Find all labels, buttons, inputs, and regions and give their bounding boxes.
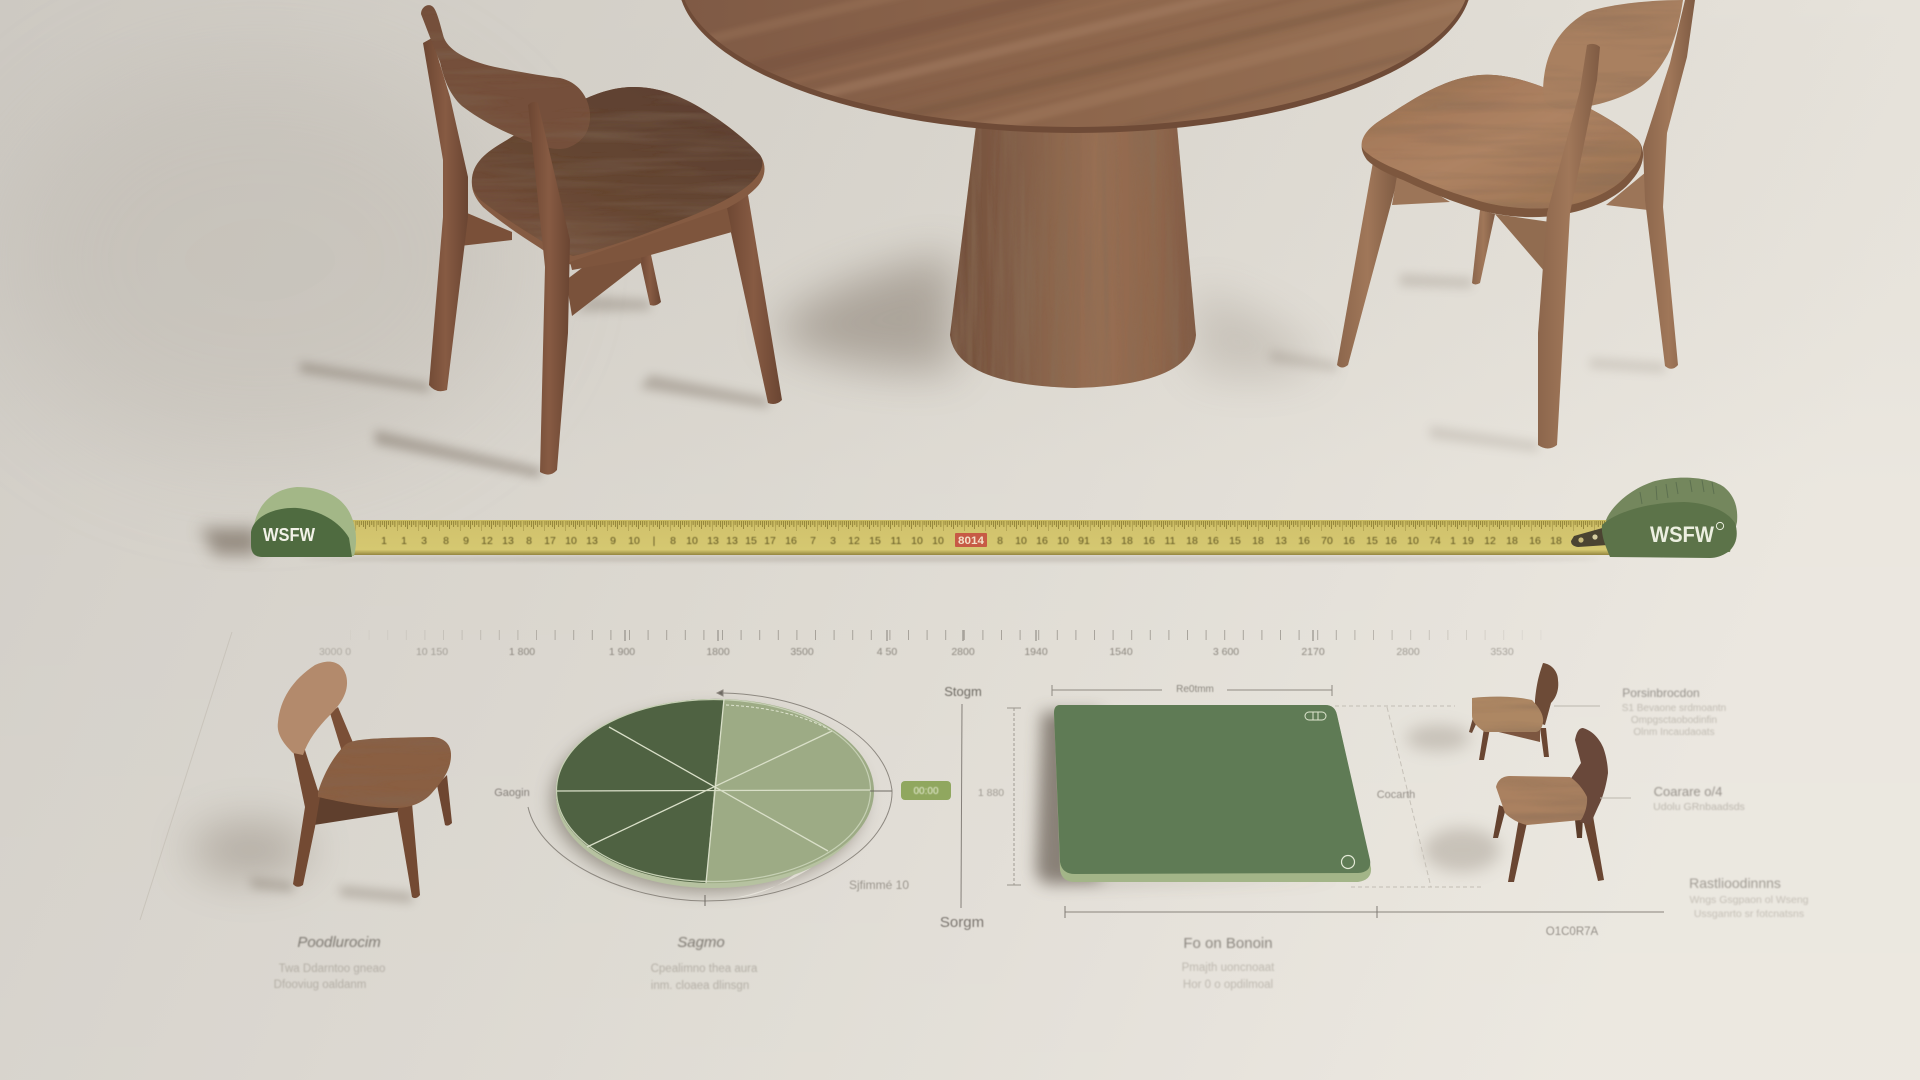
zone pill icon — [1305, 712, 1326, 720]
note lower right: Ussganrto sr fotcnatsns — [1694, 908, 1804, 920]
measurement scale labels: 3500 — [790, 646, 814, 658]
note upper right: Olnm Incaudaoats — [1633, 727, 1715, 738]
tape numbers: 10 — [1057, 535, 1069, 547]
tape numbers: 91 — [1078, 535, 1090, 547]
tape numbers: 16 — [1343, 535, 1355, 547]
tape numbers: 16 — [1143, 535, 1155, 547]
caption: chair: Dfooviug oaldanm — [274, 979, 366, 991]
floor shadows of table and chairs — [190, 255, 1665, 903]
note middle right: Coarare o/4 — [1654, 784, 1722, 799]
caption: pie: Cpealimno thea aura — [651, 963, 758, 975]
tape numbers: 17 — [764, 535, 776, 547]
caption: zone: Hor 0 o opdilmoal — [1183, 979, 1273, 991]
caption: zone: Pmajth uoncnoaat — [1182, 962, 1275, 974]
chair: large left, dark walnut — [421, 5, 782, 475]
measurement scale labels: 4 50 — [877, 646, 897, 658]
tape numbers: 74 — [1429, 535, 1441, 547]
panel height bracket — [978, 708, 1021, 885]
tape numbers: 10 — [1015, 535, 1027, 547]
bottom dimension — [1065, 906, 1664, 938]
note upper right: Porsinbrocdon — [1622, 686, 1700, 700]
pie dark half — [556, 699, 724, 883]
tape numbers: 12 — [481, 535, 493, 547]
caption: chair: Poodlurocim — [297, 934, 381, 951]
tape numbers — [381, 535, 1562, 547]
pie outer measure arcs — [528, 690, 892, 906]
note upper right: Ompgsctaobodinfin — [1631, 715, 1717, 726]
tape numbers: 15 — [745, 535, 757, 547]
tape numbers: 16 — [1298, 535, 1310, 547]
measurement scale labels: 3000 0 — [319, 646, 351, 658]
note upper right — [1622, 686, 1726, 738]
tape numbers: 1 — [1450, 535, 1456, 547]
measurement scale labels — [319, 646, 1514, 658]
tape numbers: 1 — [401, 535, 407, 547]
measurement scale labels: 1940 — [1024, 646, 1048, 658]
vertical dimension with labels: Stogm — [944, 684, 982, 699]
note lower right: Wngs Gsgpaon ol Wseng — [1689, 894, 1809, 906]
tape numbers: 9 — [463, 535, 469, 547]
tape numbers: 18 — [1186, 535, 1198, 547]
tape numbers: 9 — [610, 535, 616, 547]
tape numbers: 15 — [1229, 535, 1241, 547]
tape numbers: 70 — [1321, 535, 1333, 547]
round table top — [682, 0, 1468, 133]
tape numbers: 7 — [810, 535, 816, 547]
tape numbers: 8 — [997, 535, 1003, 547]
tape numbers: 10 — [565, 535, 577, 547]
tape numbers: 10 — [628, 535, 640, 547]
measurement scale labels: 2170 — [1301, 646, 1325, 658]
tape numbers: 13 — [1100, 535, 1112, 547]
tape numbers: 10 — [911, 535, 923, 547]
chair icon: profile — [278, 662, 452, 898]
pie lower label: Sjfimmé 10 — [849, 878, 909, 892]
tape numbers: 18 — [1252, 535, 1264, 547]
caption: zone: Fo on Bonoin — [1183, 935, 1273, 952]
tape numbers: 10 — [686, 535, 698, 547]
tape numbers: 8 — [443, 535, 449, 547]
caption: zone — [1182, 935, 1275, 991]
note lower right: Rastlioodinnns — [1689, 875, 1781, 891]
tape measure blade — [350, 520, 1610, 555]
caption: pie — [651, 934, 758, 992]
tape numbers: | — [653, 535, 655, 547]
tape numbers: 18 — [1550, 535, 1562, 547]
tape numbers: 18 — [1121, 535, 1133, 547]
tape numbers: 15 — [869, 535, 881, 547]
tape numbers: 16 — [1207, 535, 1219, 547]
bottom dimension: O1C0R7A — [1546, 926, 1599, 938]
leader lines — [1554, 706, 1631, 798]
measurement scale labels: 1 800 — [509, 646, 535, 658]
measurement scale labels: 1800 — [706, 646, 730, 658]
green rectangle zone — [1036, 705, 1371, 884]
tape numbers: 16 — [1529, 535, 1541, 547]
tape numbers: 17 — [544, 535, 556, 547]
tape case right — [1602, 478, 1737, 558]
caption: pie: inm. cloaea dlinsgn — [651, 980, 749, 992]
tape numbers: 8 — [670, 535, 676, 547]
tape numbers: 13 — [1275, 535, 1287, 547]
caption: pie: Sagmo — [677, 934, 725, 951]
small chair upper — [1469, 663, 1558, 760]
tape numbers: 3 — [421, 535, 427, 547]
note middle right: Udolu GRnbaadsds — [1653, 801, 1745, 813]
table pedestal — [950, 126, 1196, 388]
measurement scale labels: 2800 — [951, 646, 975, 658]
tape numbers: 19 — [1462, 535, 1474, 547]
pie left label: Gaogin — [494, 787, 530, 799]
tape numbers: 1 — [381, 535, 387, 547]
vertical dimension with labels — [940, 684, 984, 931]
chair: large right, lighter walnut — [1337, 0, 1695, 448]
measurement scale labels: 1 900 — [609, 646, 635, 658]
clearance guides: Cocarth — [1377, 789, 1415, 801]
measurement scale labels: 3 600 — [1213, 646, 1239, 658]
tape case left: WSFW — [263, 525, 315, 545]
caption: chair — [274, 934, 385, 991]
tape numbers: 18 — [1506, 535, 1518, 547]
pie diagram disc — [551, 699, 874, 898]
caption: chair: Twa Ddarntoo gneao — [279, 963, 385, 975]
clearance guides — [1335, 706, 1483, 887]
tape numbers: 10 — [932, 535, 944, 547]
vertical dimension with labels: Sorgm — [940, 914, 984, 931]
tape numbers: 10 — [1407, 535, 1419, 547]
note lower right — [1689, 875, 1809, 920]
note middle right — [1653, 784, 1745, 813]
tape numbers: 16 — [1385, 535, 1397, 547]
faint floor perspective line — [140, 632, 232, 920]
tape numbers: 13 — [586, 535, 598, 547]
measurement scale labels: 3530 — [1490, 646, 1514, 658]
measurement scale ticks — [350, 630, 1555, 641]
tape numbers: 13 — [726, 535, 738, 547]
measurement scale labels: 2800 — [1396, 646, 1420, 658]
back rest — [421, 5, 590, 149]
small chair lower — [1493, 728, 1608, 882]
measurement scale labels: 10 150 — [416, 646, 448, 658]
panel height bracket: 1 880 — [978, 787, 1004, 799]
pie value pill: 00:00 — [913, 786, 939, 797]
tape numbers: 13 — [502, 535, 514, 547]
tape red marker — [955, 533, 987, 547]
tape red marker: 8014 — [958, 535, 985, 547]
zone circle icon — [1342, 856, 1354, 868]
tape case right: WSFW — [1650, 522, 1714, 547]
tape hook — [1571, 527, 1608, 547]
tape numbers: 11 — [891, 535, 902, 547]
tape numbers: 13 — [707, 535, 719, 547]
tape numbers: 12 — [848, 535, 860, 547]
zone width dimension — [1052, 684, 1332, 696]
tape numbers: 16 — [1036, 535, 1048, 547]
tape numbers: 3 — [830, 535, 836, 547]
tape numbers: 11 — [1165, 535, 1176, 547]
pie value pill — [901, 781, 951, 800]
tape numbers: 12 — [1484, 535, 1496, 547]
note upper right: S1 Bevaone srdmoantn — [1622, 703, 1726, 714]
pie light half — [706, 699, 874, 883]
seat — [472, 87, 765, 265]
tape numbers: 8 — [526, 535, 532, 547]
tape numbers: 16 — [785, 535, 797, 547]
measurement scale labels: 1540 — [1109, 646, 1133, 658]
tape case left — [251, 487, 356, 557]
zone width dimension: Re0tmm — [1176, 684, 1214, 695]
tape numbers: 15 — [1366, 535, 1378, 547]
